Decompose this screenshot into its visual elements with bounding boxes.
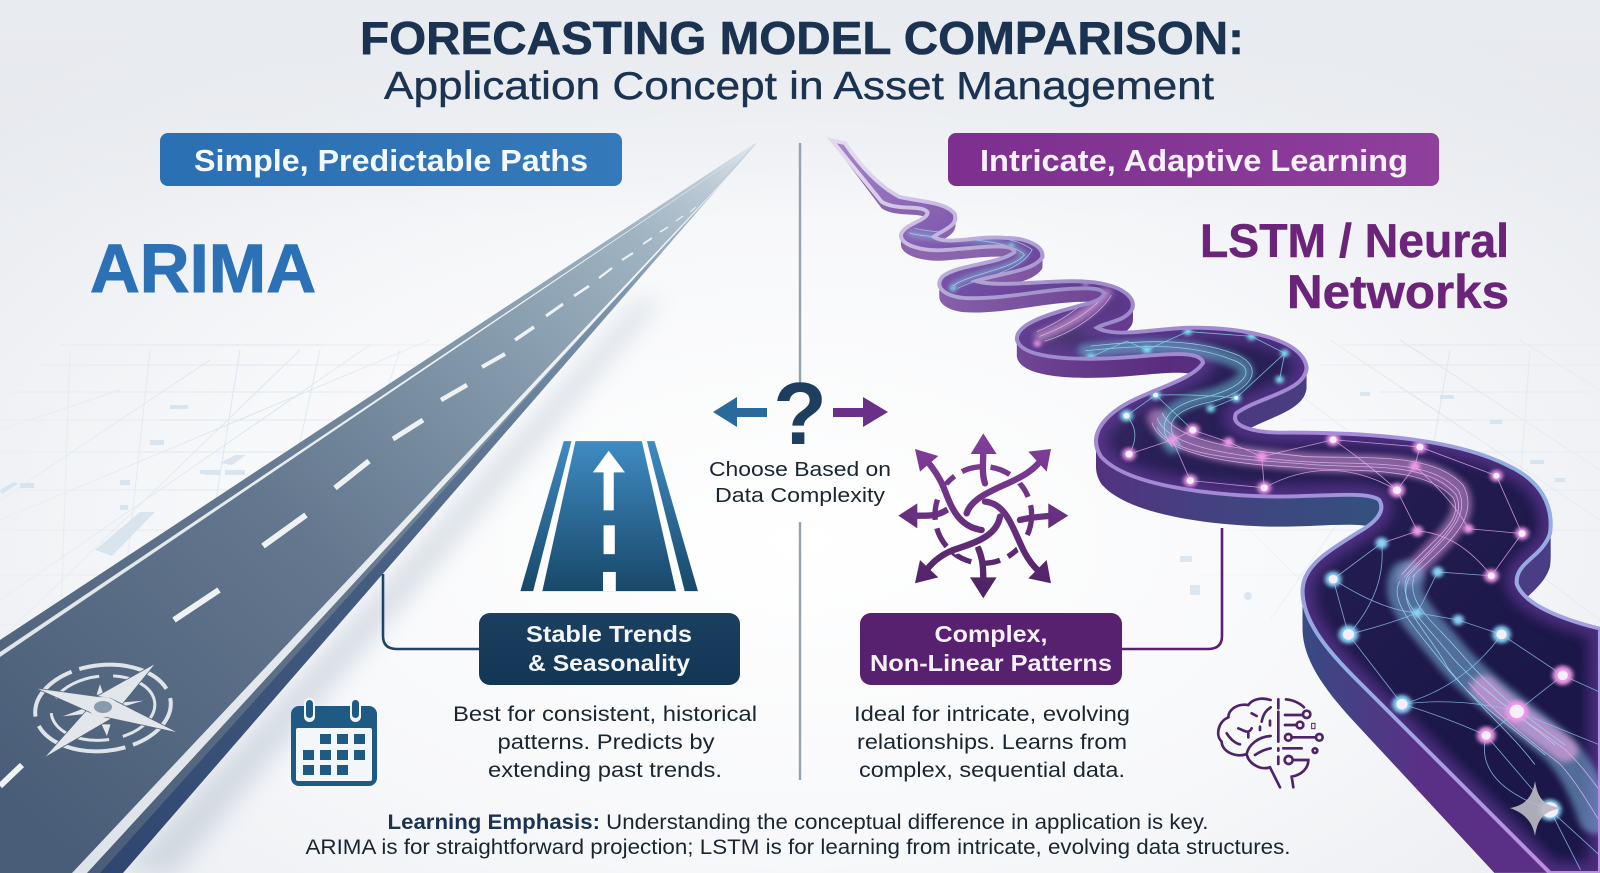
panel header: adaptive learning	[948, 133, 1439, 186]
title: FORECASTING MODEL COMPARISON:	[360, 12, 1244, 64]
text: LSTM description: Ideal for intricate, evolving	[854, 703, 1130, 726]
title block	[360, 12, 1244, 108]
road shadow	[123, 300, 660, 873]
icon: brain circuit	[1218, 699, 1323, 787]
inner edge glow	[832, 140, 1600, 873]
connector: road to stable trends	[383, 574, 482, 649]
road surface	[0, 143, 755, 873]
neural network overlay	[832, 140, 1600, 873]
choice indicator	[709, 364, 891, 507]
heading: LSTM / Neural Networks: Networks	[1287, 265, 1509, 318]
text: LSTM description	[854, 703, 1130, 782]
subtitle: Application Concept in Asset Management	[384, 65, 1214, 108]
network connections	[1091, 332, 1600, 870]
callout: stable trends	[479, 613, 740, 685]
road rim	[832, 140, 1600, 873]
panel header: adaptive learning: Intricate, Adaptive Learning	[980, 143, 1408, 178]
sparkle mark	[1510, 781, 1562, 836]
heading: LSTM / Neural Networks: LSTM / Neural	[1200, 214, 1509, 267]
icon: compass on road	[31, 658, 179, 758]
learning emphasis note: ARIMA is for straightforward projection; LSTM is for learning from intricate, evolving data structures.	[306, 836, 1290, 859]
road upper edge line	[0, 145, 756, 657]
heading: LSTM / Neural Networks	[1200, 214, 1509, 318]
text: ARIMA description: extending past trends.	[488, 759, 722, 782]
centre divider	[799, 143, 801, 780]
glowing data streams	[910, 233, 1596, 817]
text: ARIMA description	[453, 703, 757, 782]
road side wall	[95, 143, 757, 873]
callout: stable trends: & Seasonality	[528, 650, 690, 676]
text: ARIMA description: Best for consistent, historical	[453, 703, 757, 726]
panel header: simple paths	[160, 133, 622, 186]
road surface	[832, 140, 1600, 873]
icon: straight road	[520, 441, 698, 591]
heading: ARIMA: ARIMA	[90, 230, 316, 307]
arrow: left	[713, 397, 767, 427]
text: LSTM description: relationships. Learns from	[857, 731, 1127, 754]
arrow: right	[833, 397, 888, 427]
lane dashes	[0, 207, 696, 786]
straight road: ARIMA	[0, 143, 757, 873]
callout: complex patterns: Complex,	[934, 621, 1048, 647]
question mark: ?	[773, 364, 827, 463]
choice caption	[709, 458, 891, 507]
panel header: simple paths: Simple, Predictable Paths	[194, 143, 588, 178]
background grid: right	[1180, 340, 1600, 620]
callout: complex patterns	[860, 613, 1122, 685]
choice caption: Choose Based on	[709, 458, 891, 481]
winding road: LSTM / Neural Networks	[832, 140, 1600, 873]
network nodes	[950, 243, 1573, 821]
icon: calendar	[291, 698, 377, 786]
learning emphasis note: Learning Emphasis: Understanding the conceptual difference in application is key.	[388, 811, 1208, 834]
text: LSTM description: complex, sequential data.	[859, 759, 1125, 782]
icon: tangled arrows	[898, 433, 1068, 598]
callout: complex patterns: Non-Linear Patterns	[870, 650, 1112, 676]
background grid: left	[0, 340, 520, 640]
text: ARIMA description: patterns. Predicts by	[498, 731, 715, 754]
road walls	[844, 159, 1551, 873]
learning emphasis note	[306, 811, 1290, 859]
connector: winding road to complex patterns	[1120, 528, 1222, 649]
choice caption: Data Complexity	[715, 484, 886, 507]
road lower edge line	[72, 145, 757, 873]
callout: stable trends: Stable Trends	[526, 621, 692, 647]
